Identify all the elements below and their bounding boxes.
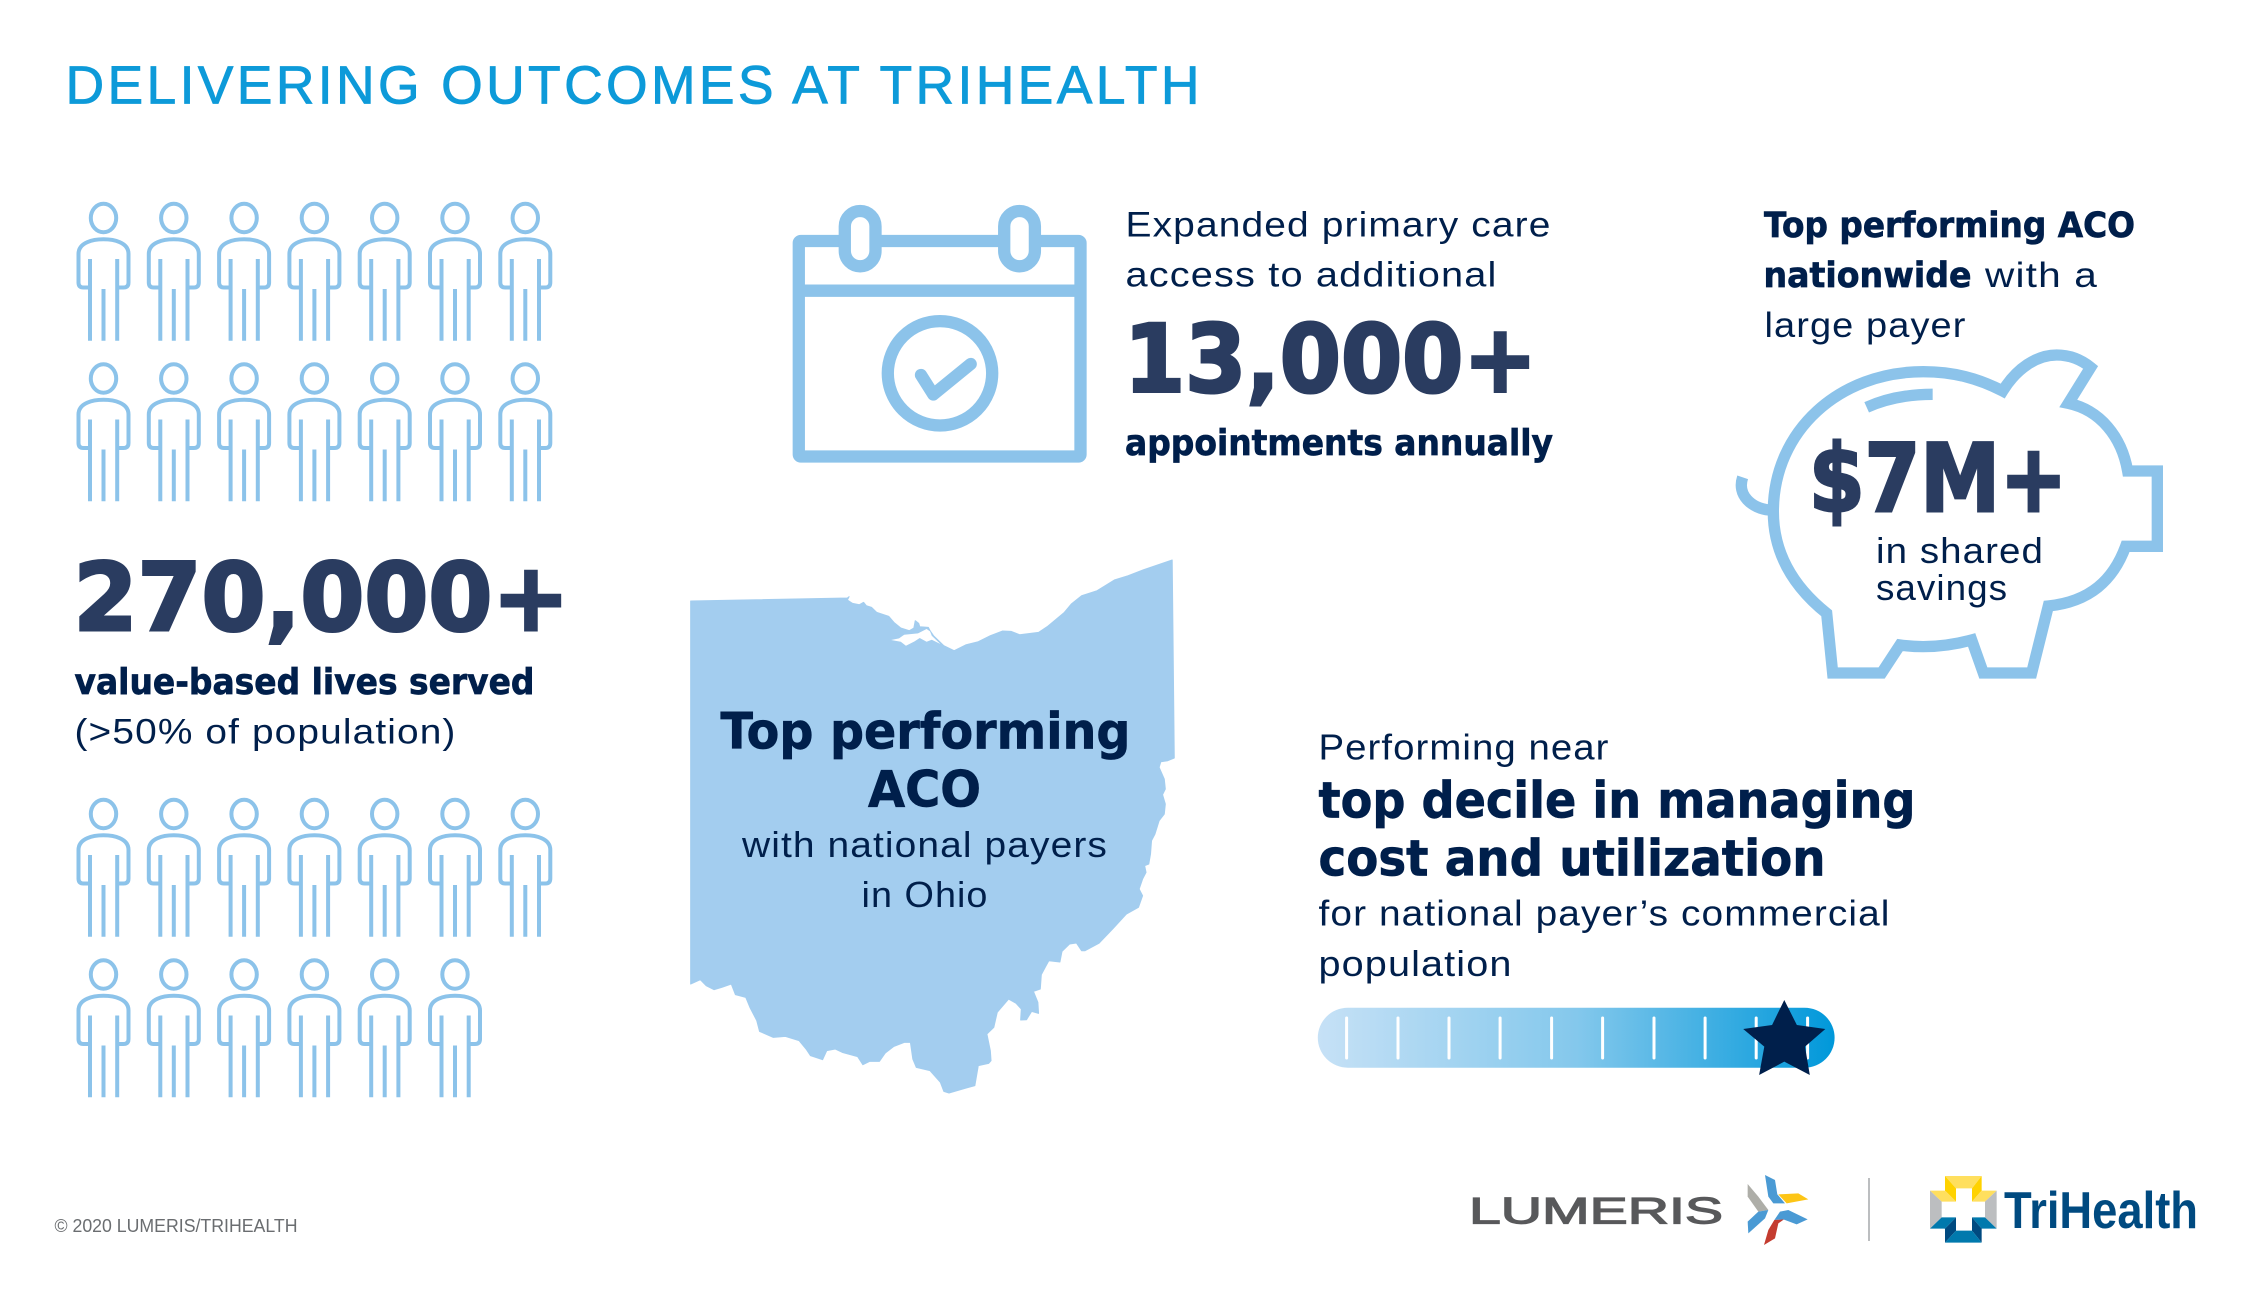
title: DELIVERING OUTCOMES AT TRIHEALTH bbox=[66, 56, 1200, 116]
panel: shared savings bbox=[1741, 206, 2157, 673]
note: share of population: (>50% of population) bbox=[74, 712, 456, 752]
text: commercial population: population bbox=[1318, 943, 1512, 984]
panel: primary care access bbox=[799, 206, 1553, 464]
map: Ohio state shape bbox=[691, 560, 1174, 1093]
text: top performing nationwide: large payer bbox=[1764, 306, 1966, 345]
text: top performing nationwide: nationwide bbox=[1764, 256, 1972, 296]
label: in shared savings: in shared bbox=[1876, 530, 2044, 571]
logo: Lumeris: LUMERIS bbox=[1469, 1190, 1723, 1232]
text: commercial population bbox=[1318, 892, 1890, 984]
icon: Lumeris star bbox=[1748, 1175, 1808, 1245]
panel: value-based lives bbox=[74, 204, 570, 1097]
text: expanded access: Expanded primary care bbox=[1126, 206, 1552, 245]
logo: TriHealth bbox=[1930, 1176, 2198, 1243]
icon group: people rows above bbox=[78, 204, 550, 501]
heading: top performing ACO: ACO bbox=[868, 760, 981, 818]
icon: calendar with check bbox=[799, 211, 1080, 456]
text: national payers in Ohio bbox=[741, 824, 1108, 915]
label: in shared savings: savings bbox=[1876, 567, 2008, 608]
icon: piggy bank bbox=[1741, 355, 2157, 673]
text: national payers in Ohio: with national payers bbox=[741, 824, 1108, 865]
label: appointments annually: appointments annually bbox=[1125, 423, 1553, 464]
text: expanded access: access to additional bbox=[1126, 256, 1498, 295]
big number: appointments: 13,000+ bbox=[1124, 306, 1537, 414]
panel: Ohio map bbox=[691, 560, 1174, 1093]
text: performing near: Performing near bbox=[1318, 726, 1610, 768]
heading: top decile: cost and utilization bbox=[1318, 830, 1826, 888]
text: top performing nationwide: with a bbox=[1984, 256, 2098, 295]
divider bbox=[1868, 1178, 1870, 1241]
copyright: © 2020 LUMERIS/TRIHEALTH bbox=[54, 1216, 298, 1236]
big number: lives served: 270,000+ bbox=[74, 544, 570, 653]
label: in shared savings bbox=[1876, 530, 2044, 608]
heading: top performing ACO bbox=[720, 702, 1130, 818]
label: value-based lives served: value-based lives served bbox=[74, 662, 534, 703]
heading: top performing ACO: Top performing bbox=[720, 702, 1130, 760]
logo: Lumeris bbox=[1469, 1175, 1808, 1245]
text: national payers in Ohio: in Ohio bbox=[862, 874, 988, 915]
gauge: gradient progress bar bbox=[1318, 1008, 1835, 1068]
heading: top decile bbox=[1318, 772, 1916, 888]
text: top performing nationwide: Top performing ACO bbox=[1764, 206, 2135, 246]
text: top performing nationwide bbox=[1764, 206, 2135, 345]
big number: savings: $7M+ bbox=[1809, 425, 2067, 534]
icon: star marker bbox=[1743, 1000, 1825, 1075]
heading: top decile: top decile in managing bbox=[1318, 772, 1916, 830]
icon group: people rows below bbox=[78, 800, 550, 1097]
wordmark: TriHealth: TriHealth bbox=[2004, 1182, 2198, 1240]
text: commercial population: for national payer’s commercial bbox=[1318, 892, 1890, 934]
icon: TriHealth cross bbox=[1930, 1176, 1997, 1243]
text: expanded access bbox=[1126, 206, 1552, 295]
panel: top decile performance bbox=[1318, 726, 1916, 1075]
